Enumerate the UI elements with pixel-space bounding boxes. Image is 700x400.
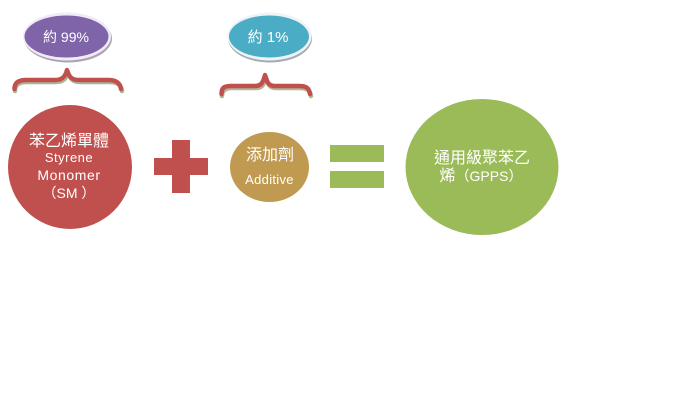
circle: GPPS bbox=[406, 99, 558, 235]
circle: styrene monomer: Styrene bbox=[45, 150, 93, 165]
badge: about 99% bbox=[23, 12, 112, 62]
circle: styrene monomer bbox=[8, 105, 132, 229]
circle: additive: 添加劑 bbox=[246, 146, 294, 164]
circle: additive: Additive bbox=[245, 172, 294, 187]
circle: GPPS: 烯（GPPS） bbox=[440, 167, 522, 185]
circle: styrene monomer: 苯乙烯單體 bbox=[29, 132, 109, 150]
circle: styrene monomer: （SM ） bbox=[43, 185, 95, 201]
equals sign bbox=[330, 145, 384, 188]
plus sign bbox=[154, 140, 208, 193]
circle: GPPS: 通用級聚苯乙 bbox=[434, 149, 530, 167]
badge: about 1%: 約 1% bbox=[248, 29, 288, 46]
brace: 1% bracket bbox=[222, 75, 311, 96]
brace: 99% bracket bbox=[14, 70, 122, 91]
badge: about 99%: 約 99% bbox=[43, 29, 89, 45]
circle: additive bbox=[230, 132, 309, 202]
badge: about 1% bbox=[228, 12, 312, 62]
circle: styrene monomer: Monomer bbox=[37, 167, 101, 183]
